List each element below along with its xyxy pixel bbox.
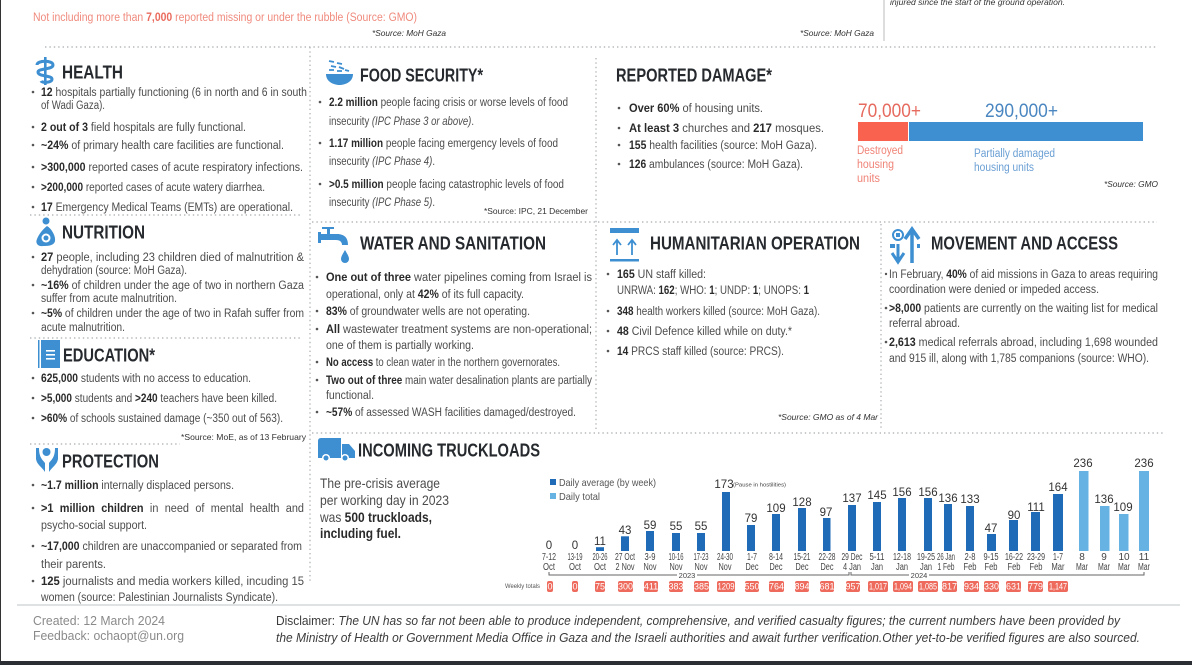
pre-crisis text — [319, 475, 449, 541]
list — [885, 269, 1158, 365]
list: operational, only at 42% of its full capacity. — [326, 289, 524, 301]
list: >5,000 students and >240 teachers have been killed. — [41, 393, 277, 405]
bar chart: truckloads per week: Oct — [543, 562, 555, 573]
bar chart: truckloads per week: 10 — [1118, 552, 1130, 563]
weekly totals row: 75 — [595, 582, 605, 592]
stacked bar: housing damage: Destroyed — [857, 145, 903, 157]
bar chart: truckloads per week: 27 Oct — [615, 552, 635, 563]
bar chart: truckloads per week: 29 Dec — [842, 552, 862, 563]
bar chart: truckloads per week: Nov — [670, 562, 682, 573]
list: >60% of schools sustained damage (~350 out of 563). — [41, 413, 283, 425]
panel: food security — [319, 61, 588, 216]
list: acute malnutrition. — [41, 322, 125, 334]
footer: created and feedback: Feedback: ochaopt@un.org — [33, 628, 184, 643]
bar chart: truckloads per week: Jan — [920, 562, 932, 573]
heading: MOVEMENT AND ACCESS — [931, 234, 1118, 254]
bar chart: truckloads per week: Jan — [871, 562, 883, 573]
bar chart: truckloads per week: Dec — [770, 562, 782, 573]
stacked bar: housing damage: 290,000+ — [985, 101, 1058, 122]
bar chart: truckloads per week: 90 — [1008, 510, 1020, 522]
weekly totals row: 817 — [942, 582, 957, 592]
weekly totals row: 779 — [1028, 582, 1043, 592]
source note: *Source: MoH Gaza — [800, 28, 874, 38]
source note: *Source: MoE, as of 13 February — [181, 432, 307, 442]
weekly totals row: 1209 — [718, 582, 734, 592]
list: suffer from acute malnutrition. — [41, 293, 177, 305]
bar chart: truckloads per week: 8-14 — [769, 552, 783, 563]
bar chart: truckloads per week: 136 — [1094, 494, 1114, 506]
stacked bar: housing damage: housing units — [974, 162, 1034, 174]
bar chart: truckloads per week: Mar — [1076, 562, 1088, 573]
list: 48 Civil Defence killed while on duty.* — [617, 326, 792, 338]
footer: disclaimer: Disclaimer: The UN has so far not been able to produce independent, comprehensive, and verified casualty figures; the current numbers have been provided by — [276, 613, 1121, 628]
heading: INCOMING TRUCKLOADS — [358, 440, 540, 460]
bar chart: truckloads per week: 10-16 — [668, 552, 684, 563]
bar chart: truckloads per week: 136 — [938, 493, 958, 505]
weekly totals row: 894 — [794, 582, 810, 592]
source note: *Source: GMO — [1104, 179, 1158, 189]
list: 2.2 million people facing crisis or worse levels of food — [329, 97, 568, 109]
bar chart: truckloads per week: 15-21 — [794, 552, 811, 563]
bar chart: truckloads per week: 2-8 — [964, 552, 976, 563]
bar chart: truckloads per week: Oct — [594, 562, 606, 573]
list: 348 health workers killed (source: MoH Gaza). — [617, 306, 820, 318]
chart legend: Daily total — [559, 491, 600, 503]
weekly totals row: 411 — [644, 582, 658, 592]
bar chart: truckloads per week: 59 — [644, 520, 656, 532]
list: 14 PRCS staff killed (source: PRCS). — [617, 346, 784, 358]
icon: bowl of grain — [326, 61, 353, 85]
list: In February, 40% of aid missions in Gaza to areas requiring — [889, 269, 1158, 281]
weekly totals row: 0 — [547, 582, 553, 592]
bar chart: truckloads per week: 16-22 — [1005, 552, 1023, 563]
list: one of them is partially working. — [326, 340, 474, 352]
bar chart: truckloads per week: Oct — [569, 562, 581, 573]
bar chart: truckloads per week: 24-30 — [717, 552, 733, 563]
chart legend — [550, 477, 656, 503]
panel: humanitarian operation — [607, 228, 879, 422]
list: ~5% of children under the age of two in Rafah suffer from — [41, 308, 304, 320]
list: ~24% of primary health care facilities are functional. — [41, 140, 284, 152]
heading: FOOD SECURITY* — [360, 66, 483, 86]
top note: missing under rubble: Not including more than 7,000 reported missing or under the rubble (Source: GMO) — [33, 12, 417, 24]
list: insecurity (IPC Phase 3 or above). — [329, 116, 474, 128]
weekly totals row: 300 — [618, 582, 633, 592]
list: At least 3 churches and 217 mosques. — [629, 123, 824, 135]
bar chart: truckloads per week: 2024 — [911, 571, 927, 580]
weekly totals row: 1,147 — [1049, 582, 1067, 592]
weekly totals row: 1,017 — [869, 582, 887, 592]
icon: arrows up between bars — [610, 228, 639, 262]
bar chart: truckloads per week: Mar — [1138, 562, 1150, 573]
stacked bar: housing damage: Partially damaged — [974, 148, 1055, 160]
pre-crisis text: was 500 truckloads, — [319, 509, 432, 525]
source note: *Source: IPC, 21 December — [484, 206, 588, 216]
list: dehydration (source: MoH Gaza). — [41, 265, 187, 277]
panel: movement and access — [885, 229, 1158, 365]
list: insecurity (IPC Phase 4). — [329, 156, 435, 168]
list: 2 out of 3 field hospitals are fully functional. — [41, 122, 246, 134]
footer: disclaimer — [276, 613, 1140, 645]
bar chart: truckloads per week: 111 — [1027, 502, 1045, 514]
list: UNRWA: 162; WHO: 1; UNDP: 1; UNOPS: 1 — [617, 285, 810, 297]
bar chart: truckloads per week: 1-7 — [747, 552, 757, 563]
list: 17 Emergency Medical Teams (EMTs) are operational. — [41, 202, 293, 214]
list — [316, 272, 592, 419]
footer: created and feedback: Created: 12 March 2024 — [33, 613, 165, 628]
list: ~16% of children under the age of two in northern Gaza — [41, 280, 305, 292]
list: 2,613 medical referrals abroad, including 1,698 wounded — [889, 337, 1158, 349]
heading: PROTECTION — [62, 452, 159, 472]
bar chart: truckloads per week: 43 — [619, 525, 631, 537]
bar chart: truckloads per week: 5-11 — [870, 552, 885, 563]
list: >300,000 reported cases of acute respiratory infections. — [41, 162, 303, 174]
bar chart: truckloads per week: 164 — [1048, 482, 1068, 494]
bar chart: truckloads per week: 22-28 — [818, 552, 836, 563]
panel: reported damage — [616, 66, 1158, 189]
list: 155 health facilities (source: MoH Gaza). — [629, 140, 817, 152]
list: women (source: Palestinian Journalists Syndicate). — [40, 592, 278, 604]
stacked bar: housing damage: 70,000+ — [858, 101, 921, 122]
list — [32, 252, 305, 334]
bar chart: truckloads per week: 1 Feb — [938, 562, 955, 573]
bar chart: truckloads per week: Dec — [746, 562, 758, 573]
bar chart: truckloads per week: 2023 — [679, 571, 695, 580]
stacked bar: housing damage: units — [857, 173, 880, 185]
list: One out of three water pipelines coming from Israel is — [326, 272, 592, 284]
bar chart: truckloads per week: Feb — [984, 562, 998, 573]
bar chart: truckloads per week: 12-18 — [893, 552, 911, 563]
bar chart: truckloads per week: 7-12 — [542, 552, 556, 563]
bar chart: truckloads per week: Mar — [1052, 562, 1065, 573]
icon: protective hands — [36, 448, 58, 472]
bar chart: truckloads per week: 20-26 — [592, 552, 608, 563]
list: of Wadi Gaza). — [41, 100, 105, 112]
bar chart: truckloads per week: 47 — [985, 523, 997, 535]
bar chart: truckloads per week: 109 — [1113, 502, 1133, 514]
bar chart: truckloads per week: 23-29 — [1027, 552, 1045, 563]
bar chart: truckloads per week: 1-7 — [1053, 552, 1063, 563]
bar chart: truckloads per week: Jan — [896, 562, 908, 573]
list: >8,000 patients are currently on the waiting list for medical — [889, 303, 1158, 315]
icon: mother and child — [36, 218, 55, 246]
bar chart: truckloads per week: 173 — [714, 479, 734, 491]
weekly totals row: 681 — [819, 582, 835, 592]
pre-crisis text: including fuel. — [320, 525, 401, 541]
footer: created and feedback — [33, 613, 184, 643]
icon: truck — [318, 438, 355, 462]
icon: caduceus — [37, 57, 53, 85]
list: >200,000 reported cases of acute watery diarrhea. — [41, 182, 265, 194]
bar chart: truckloads per week: 3-9 — [644, 552, 656, 563]
heading: HEALTH — [62, 62, 123, 82]
bar chart: truckloads per week: 55 — [695, 521, 707, 533]
bar chart: truckloads per week: Dec — [820, 562, 834, 573]
bar chart: truckloads per week: Feb — [964, 562, 977, 573]
list: ~1.7 million internally displaced persons. — [41, 480, 234, 492]
bar chart: truckloads per week: 8 — [1079, 552, 1085, 563]
stacked bar: housing damage: housing — [857, 159, 894, 171]
weekly totals row: 631 — [1006, 582, 1021, 592]
bar chart: truckloads per week: (Pause in hostilities) — [733, 482, 786, 488]
bar chart: truckloads per week: Nov — [718, 562, 732, 573]
bar chart: truckloads per week: 0 — [572, 540, 578, 552]
pre-crisis text: per working day in 2023 — [320, 492, 449, 508]
heading: EDUCATION* — [63, 346, 155, 366]
list: ~17,000 children are unaccompanied or separated from — [41, 541, 302, 553]
bar chart: truckloads per week: 236 — [1134, 458, 1154, 470]
bar chart: truckloads per week: 137 — [842, 493, 862, 505]
bar chart: truckloads per week: 236 — [1073, 458, 1093, 470]
footer: disclaimer: the Ministry of Health or Government Media Office in Gaza and the Israeli authorities and await further verification.Other yet-to-be verified figures are also sourced. — [276, 630, 1140, 645]
bar chart: truckloads per week — [542, 458, 1154, 580]
weekly totals row: 550 — [744, 582, 760, 592]
weekly totals row: 385 — [694, 582, 709, 592]
panel: protection — [32, 448, 304, 604]
weekly totals row: 330 — [984, 582, 999, 592]
icon: book — [38, 340, 60, 368]
bar chart: truckloads per week: 13-19 — [568, 552, 583, 563]
bar chart: truckloads per week: Nov — [694, 562, 708, 573]
bar chart: truckloads per week: 109 — [766, 503, 786, 515]
list: and 915 ill, along with 1,785 companions (source: WHO). — [889, 353, 1149, 365]
bar chart: truckloads per week: 156 — [918, 487, 938, 499]
icon: water tap — [318, 227, 349, 263]
bar chart: truckloads per week: 2 Nov — [616, 562, 634, 573]
source note: *Source: GMO as of 4 Mar — [778, 412, 879, 422]
list — [319, 97, 568, 209]
list: their parents. — [41, 559, 106, 571]
list — [607, 269, 820, 358]
bar chart: truckloads per week: 11 — [594, 536, 606, 548]
weekly totals row: 0 — [572, 582, 578, 592]
heading: NUTRITION — [62, 222, 145, 242]
bar chart: truckloads per week: Nov — [644, 562, 656, 573]
bar chart: truckloads per week: 4 Jan — [843, 562, 861, 573]
list: Over 60% of housing units. — [629, 103, 763, 115]
bar chart: truckloads per week: 19-25 — [917, 552, 935, 563]
bar chart: truckloads per week: 133 — [960, 494, 980, 506]
source note: *Source: MoH Gaza — [372, 28, 446, 38]
weekly totals row: 957 — [845, 582, 861, 592]
list: No access to clean water in the northern governorates. — [326, 357, 560, 369]
list: >1 million children in need of mental health and — [41, 503, 304, 515]
bar chart: truckloads per week: 145 — [867, 490, 887, 502]
bar chart: truckloads per week: 79 — [745, 513, 757, 525]
bar chart: truckloads per week: Dec — [796, 562, 808, 573]
pre-crisis text: The pre-crisis average — [320, 475, 440, 491]
list: coordination were denied or impeded access. — [889, 284, 1099, 296]
weekly totals row — [505, 581, 1068, 592]
list: ~57% of assessed WASH facilities damaged/destroyed. — [326, 407, 576, 419]
bar chart: truckloads per week: Feb — [1008, 562, 1021, 573]
list — [618, 103, 824, 171]
list: 125 journalists and media workers killed, incuding 15 — [41, 576, 304, 588]
bar chart: truckloads per week: Feb — [1030, 562, 1043, 573]
list: All wastewater treatment systems are non-operational; — [326, 324, 592, 336]
list: insecurity (IPC Phase 5). — [329, 197, 435, 209]
bar chart: truckloads per week: 9-15 — [984, 552, 999, 563]
weekly totals row: Weekly totals — [505, 583, 541, 590]
list: >0.5 million people facing catastrophic levels of food — [329, 179, 564, 191]
bar chart: truckloads per week: 11 — [1139, 552, 1150, 563]
bar chart: truckloads per week: Mar — [1118, 562, 1130, 573]
list: 165 UN staff killed: — [617, 269, 706, 281]
weekly totals row: 1,094 — [894, 582, 912, 592]
icon: movement arrows — [890, 229, 920, 263]
list: 126 ambulances (source: MoH Gaza). — [629, 159, 803, 171]
panel: health — [32, 57, 307, 214]
bar chart: truckloads per week: 156 — [892, 487, 912, 499]
chart legend: Daily average (by week) — [559, 477, 656, 489]
heading: WATER AND SANITATION — [360, 234, 546, 254]
list: psycho-social support. — [41, 520, 147, 532]
panel: nutrition — [32, 218, 305, 334]
list — [32, 373, 283, 425]
list: 83% of groundwater wells are not operating. — [326, 306, 530, 318]
panel: education — [32, 340, 307, 442]
list: 12 hospitals partially functioning (6 in north and 6 in south — [41, 87, 307, 99]
stacked bar: housing damage — [857, 101, 1143, 185]
heading: REPORTED DAMAGE* — [616, 66, 772, 86]
bar chart: truckloads per week: Mar — [1098, 562, 1110, 573]
panel: water and sanitation — [316, 227, 592, 419]
bar chart: truckloads per week: 55 — [670, 521, 682, 533]
weekly totals row: 934 — [964, 582, 979, 592]
bar chart: truckloads per week: 97 — [820, 507, 832, 519]
list: 27 people, including 23 children died of malnutrition & — [41, 252, 304, 264]
bar chart: truckloads per week: 128 — [792, 497, 812, 509]
list: referral abroad. — [889, 318, 960, 330]
list: 625,000 students with no access to education. — [41, 373, 251, 385]
bar chart: truckloads per week: 9 — [1101, 552, 1107, 563]
list: 1.17 million people facing emergency levels of food — [329, 138, 558, 150]
bar chart: truckloads per week: 17-23 — [694, 552, 709, 563]
list: functional. — [326, 390, 374, 402]
weekly totals row: 383 — [668, 582, 684, 592]
list: Two out of three main water desalination plants are partially — [326, 375, 592, 387]
weekly totals row: 764 — [769, 582, 784, 592]
list — [32, 87, 307, 214]
list — [32, 480, 304, 604]
weekly totals row: 1,085 — [919, 582, 937, 592]
bar chart: truckloads per week: 0 — [546, 540, 552, 552]
bar chart: truckloads per week: 26 Jan — [937, 552, 955, 563]
heading: HUMANITARIAN OPERATION — [650, 234, 860, 254]
panel: incoming truckloads — [318, 438, 1154, 592]
